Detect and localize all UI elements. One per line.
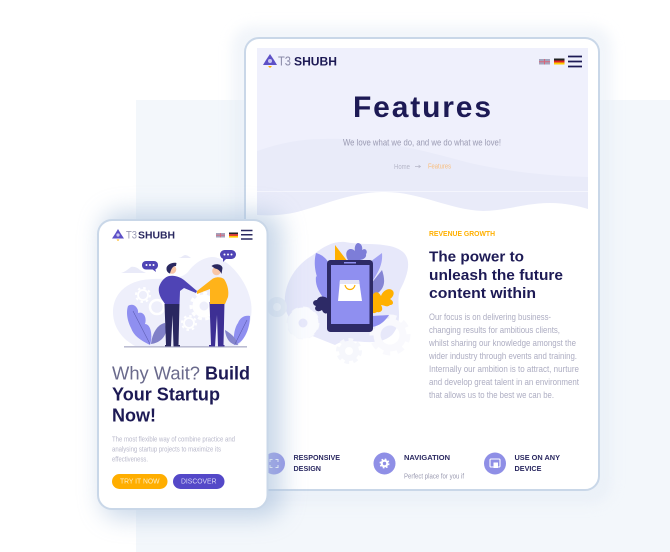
mobile logo: SHUBH bbox=[138, 230, 175, 242]
feature: use on any device: USE ON ANY bbox=[514, 453, 560, 462]
mobile headline: Now! bbox=[112, 404, 156, 426]
blob background bbox=[285, 242, 408, 345]
mobile headline: Why Wait? bbox=[112, 362, 200, 384]
feature: navigation bbox=[374, 452, 464, 480]
breadcrumb: Features bbox=[428, 164, 451, 170]
hero title: Features bbox=[353, 91, 491, 124]
background panel bbox=[136, 100, 670, 552]
body paragraph: and develop great talent in an environment bbox=[429, 377, 579, 388]
mobile shadow bbox=[102, 212, 282, 518]
breadcrumb bbox=[394, 164, 451, 171]
phone screen bbox=[331, 265, 370, 324]
feature: responsive design: DESIGN bbox=[294, 464, 321, 473]
feature: responsive design bbox=[263, 452, 340, 474]
speech bubbles bbox=[142, 250, 236, 272]
panel: tablet mockup bbox=[232, 26, 612, 504]
button: discover: DISCOVER bbox=[181, 477, 217, 486]
body paragraph bbox=[428, 312, 579, 401]
leaves bbox=[315, 253, 334, 296]
illustration: phone with shopping bag bbox=[270, 242, 408, 362]
feature: responsive design: RESPONSIVE bbox=[294, 453, 340, 462]
tablet logo: SHUBH bbox=[294, 54, 337, 68]
section heading: content within bbox=[429, 285, 536, 302]
illustration: handshake bbox=[113, 250, 252, 348]
gears bbox=[270, 300, 408, 362]
mobile headline: Your Startup bbox=[112, 384, 220, 404]
body paragraph: that allows us to the best we can be. bbox=[429, 390, 554, 401]
feature: navigation: NAVIGATION bbox=[404, 453, 450, 462]
tablet logo bbox=[263, 54, 337, 68]
button: try it now: TRY IT NOW bbox=[120, 477, 160, 486]
body paragraph: changing results for ambitious clients, bbox=[429, 325, 560, 336]
body paragraph: Our focus is on delivering business- bbox=[429, 312, 551, 323]
plants bbox=[127, 305, 151, 345]
panel: mobile mockup bbox=[98, 220, 268, 509]
right man bbox=[197, 264, 228, 346]
hero banner bbox=[257, 48, 588, 222]
mobile description bbox=[112, 434, 235, 464]
mobile description: effectiveness. bbox=[112, 454, 148, 464]
body paragraph: whilst sharing our knowledge amongst the bbox=[428, 338, 576, 349]
feature: use on any device: DEVICE bbox=[514, 464, 542, 473]
gears bbox=[136, 288, 217, 330]
tablet flags and menu bbox=[539, 56, 582, 66]
body paragraph: wider industry through events and training. bbox=[428, 351, 577, 362]
ground bbox=[124, 346, 247, 348]
eyebrow: REVENUE GROWTH bbox=[429, 231, 495, 238]
section heading: unleash the future bbox=[429, 267, 563, 284]
mobile headline: Build bbox=[205, 362, 250, 384]
mobile description: analysing startup projects to maximize its bbox=[112, 444, 221, 454]
feature: use on any device bbox=[484, 452, 560, 474]
button: discover bbox=[173, 474, 224, 489]
mobile flags and menu bbox=[216, 230, 252, 239]
phone body bbox=[327, 260, 373, 332]
breadcrumb: Home bbox=[394, 164, 410, 171]
mobile logo bbox=[112, 229, 175, 242]
body paragraph: Internally our ambition is to attract, nurture bbox=[429, 364, 579, 375]
shopping bag bbox=[338, 280, 362, 301]
mobile logo: T3 bbox=[126, 230, 137, 242]
tablet logo: T3 bbox=[278, 54, 291, 68]
blob bbox=[113, 257, 252, 346]
hero subtitle: We love what we do, and we do what we love! bbox=[343, 138, 501, 148]
mobile headline bbox=[112, 362, 250, 426]
button: try it now bbox=[112, 474, 168, 489]
clouds bbox=[121, 267, 146, 273]
section heading bbox=[429, 248, 563, 302]
feature: navigation: Perfect place for you if bbox=[404, 474, 464, 480]
mobile description: The most flexible way of combine practice and bbox=[112, 434, 235, 444]
left man bbox=[159, 263, 197, 346]
section heading: The power to bbox=[429, 248, 524, 266]
